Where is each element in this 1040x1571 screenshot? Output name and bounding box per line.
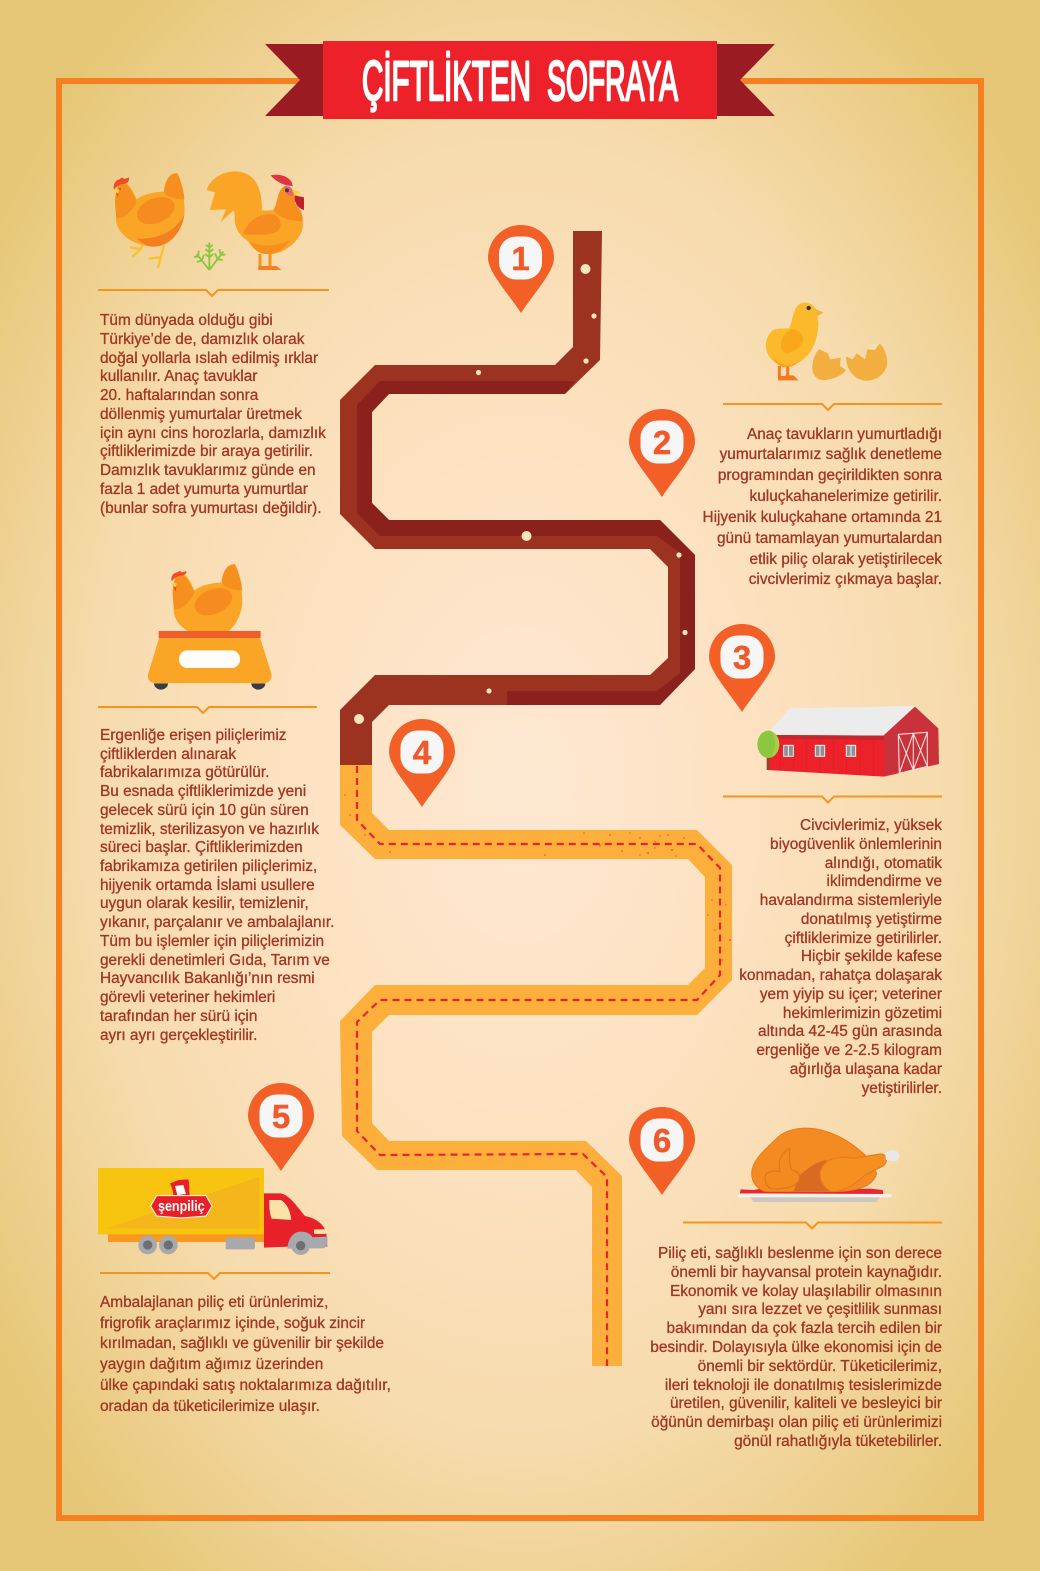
text block 2: [702, 426, 942, 588]
text block 2: Anaç tavukların yumurtladığı: [747, 426, 942, 442]
text block 3: uygun olarak kesilir, temizlenir,: [100, 895, 309, 912]
title ribbon: [265, 41, 775, 119]
title ribbon: SOFRAYA: [547, 49, 678, 112]
text block 3: fabrikalarımıza götürülür.: [100, 764, 269, 781]
text block 1: 20. haftalarından sonra: [100, 387, 258, 404]
text block 1: (bunlar sofra yumurtası değildir).: [100, 500, 322, 516]
icon: delivery truck: [98, 1168, 328, 1255]
text block 4: havalandırma sistemleriyle: [760, 892, 942, 909]
pin 6: 6: [653, 1122, 671, 1159]
text block 3: süreci başlar. Çiftliklerimizden: [100, 839, 303, 856]
plant: [194, 243, 225, 270]
text block 4: ağırlığa ulaşana kadar: [790, 1061, 942, 1078]
text block 2: kuluçkahanelerimize getirilir.: [750, 488, 942, 505]
text block 4: hekimlerimizin gözetimi: [783, 1004, 942, 1022]
text block 6: gönül rahatlığıyla tüketebilirler.: [734, 1433, 942, 1450]
text block 4: donatılmış yetiştirme: [801, 911, 942, 928]
text block 4: Civcivlerimiz, yüksek: [800, 817, 942, 834]
text block 3: Bu esnada çiftliklerimizde yeni: [100, 783, 306, 800]
text block 3: yıkanır, parçalanır ve ambalajlanır.: [100, 914, 334, 931]
text block 5: [100, 1294, 391, 1415]
pin 6: [629, 1107, 695, 1195]
text block 6: yanı sıra lezzet ve çeşitlilik sunması: [698, 1301, 942, 1318]
text block 3: Ergenliğe erişen piliçlerimiz: [100, 727, 286, 744]
divider 3: [98, 707, 317, 713]
text block 2: yumurtalarımız sağlık denetleme: [720, 446, 942, 463]
pin 4: [389, 719, 455, 807]
text block 1: kullanılır. Anaç tavuklar: [100, 368, 257, 385]
text block 5: kırılmadan, sağlıklı ve güvenilir bir şekilde: [100, 1335, 384, 1352]
text block 3: ayrı ayrı gerçekleştirilir.: [100, 1026, 257, 1044]
text block 6: bakımından da çok fazla tercih edilen bir: [667, 1320, 942, 1337]
road: yellow section: [340, 765, 732, 1366]
text block 1: [100, 312, 326, 517]
title ribbon: ÇİFTLİKTEN: [362, 49, 531, 112]
text block 1: Türkiye’de de, damızlık olarak: [100, 331, 304, 348]
şenpiliç logo: [151, 1179, 212, 1218]
pin 1: 1: [511, 240, 530, 277]
text block 4: alındığı, otomatik: [825, 854, 942, 872]
text block 6: üretilen, güvenilir, kaliteli ve besleyici bir: [670, 1395, 942, 1412]
icon: barn: [757, 706, 939, 777]
text block 6: Piliç eti, sağlıklı beslenme için son derece: [658, 1245, 942, 1262]
text block 3: gerekli denetimleri Gıda, Tarım ve: [100, 952, 330, 969]
text block 3: temizlik, sterilizasyon ve hazırlık: [100, 821, 319, 838]
road: brown section: [340, 231, 695, 766]
text block 4: konmadan, rahatça dolaşarak: [739, 967, 942, 984]
text block 1: doğal yollarla ıslah edilmiş ırklar: [100, 350, 318, 366]
text block 6: önemli bir hayvansal protein kaynağıdır.: [671, 1264, 942, 1281]
text block 3: Tüm bu işlemler için piliçlerimizin: [100, 933, 324, 950]
text block 3: [100, 727, 334, 1044]
text block 4: Hiçbir şekilde kafese: [801, 948, 942, 965]
text block 1: döllenmiş yumurtalar üretmek: [100, 406, 302, 423]
text block 1: çiftliklerimizde bir araya getirilir.: [100, 443, 313, 460]
pin 4: 4: [413, 734, 432, 771]
divider 4: [723, 796, 942, 802]
pin 5: [248, 1083, 314, 1171]
pin 3: 3: [733, 639, 751, 676]
text block 3: gelecek sürü için 10 gün süren: [100, 802, 309, 819]
text block 6: ileri teknoloji ile donatılmış tesislerimizde: [665, 1377, 942, 1394]
icon: hen on scale: [148, 564, 272, 690]
text block 5: yaygın dağıtım ağımız üzerinden: [100, 1356, 323, 1373]
text block 2: programından geçirildikten sonra: [718, 467, 942, 484]
text block 3: Hayvancılık Bakanlığı’nın resmi: [100, 970, 315, 987]
pin 3: [709, 624, 775, 712]
text block 4: [739, 817, 942, 1097]
text block 2: günü tamamlayan yumurtalardan: [717, 530, 942, 547]
text block 3: görevli veteriner hekimleri: [100, 989, 275, 1006]
text block 2: Hijyenik kuluçkahane ortamında 21: [702, 509, 942, 526]
text block 4: ergenliğe ve 2-2.5 kilogram: [756, 1042, 942, 1059]
text block 3: fabrikamıza getirilen piliçlerimiz,: [100, 858, 317, 875]
text block 5: frigrofik araçlarımız içinde, soğuk zincir: [100, 1315, 365, 1332]
text block 4: iklimdendirme ve: [827, 873, 942, 890]
text block 4: biyogüvenlik önlemlerinin: [770, 836, 942, 853]
text block 2: etlik piliç olarak yetiştirilecek: [750, 551, 942, 568]
text block 1: Tüm dünyada olduğu gibi: [100, 312, 273, 329]
text block 6: besindir. Dolayısıyla ülke ekonomisi için de: [650, 1339, 942, 1356]
şenpiliç logo: şenpiliç: [158, 1199, 205, 1215]
text block 4: altında 42-45 gün arasında: [758, 1023, 942, 1040]
text block 6: [650, 1245, 942, 1450]
icon: hen and rooster: [113, 171, 304, 270]
pin 1: [488, 225, 554, 313]
divider 6: [683, 1222, 942, 1228]
text block 4: yem yiyip su içer; veteriner: [760, 986, 942, 1003]
pin 5: 5: [272, 1098, 290, 1135]
icon: roast chicken: [738, 1128, 899, 1202]
divider 1: [98, 290, 329, 296]
rooster: [207, 171, 304, 270]
pin 2: [629, 409, 695, 497]
hen: [113, 173, 185, 268]
text block 3: çiftliklerden alınarak: [100, 746, 236, 763]
text block 4: yetiştirilirler.: [862, 1080, 942, 1096]
text block 6: Ekonomik ve kolay ulaşılabilir olmasının: [670, 1283, 942, 1300]
text block 5: ülke çapındaki satış noktalarımıza dağıtılır,: [100, 1377, 391, 1394]
text block 1: Damızlık tavuklarımız günde en: [100, 462, 316, 479]
icon: chick and eggshells: [766, 303, 887, 381]
text block 1: için aynı cins horozlarla, damızlık: [100, 424, 326, 442]
divider 2: [723, 404, 942, 410]
divider 5: [100, 1273, 330, 1279]
text block 6: öğünün demirbaşı olan piliç eti ürünlerimizi: [651, 1414, 942, 1431]
text block 3: hijyenik ortamda İslami usullere: [100, 877, 315, 894]
text block 1: fazla 1 adet yumurta yumurtlar: [100, 481, 308, 498]
text block 3: tarafından her sürü için: [100, 1008, 257, 1025]
text block 6: önemli bir sektördür. Tüketicilerimiz,: [698, 1358, 942, 1375]
text block 4: çiftliklerimize getirilirler.: [785, 930, 942, 946]
text block 5: Ambalajlanan piliç eti ürünlerimiz,: [100, 1294, 328, 1311]
text block 2: civcivlerimiz çıkmaya başlar.: [749, 571, 942, 588]
text block 5: oradan da tüketicilerimize ulaşır.: [100, 1398, 320, 1415]
pin 2: 2: [653, 424, 671, 461]
